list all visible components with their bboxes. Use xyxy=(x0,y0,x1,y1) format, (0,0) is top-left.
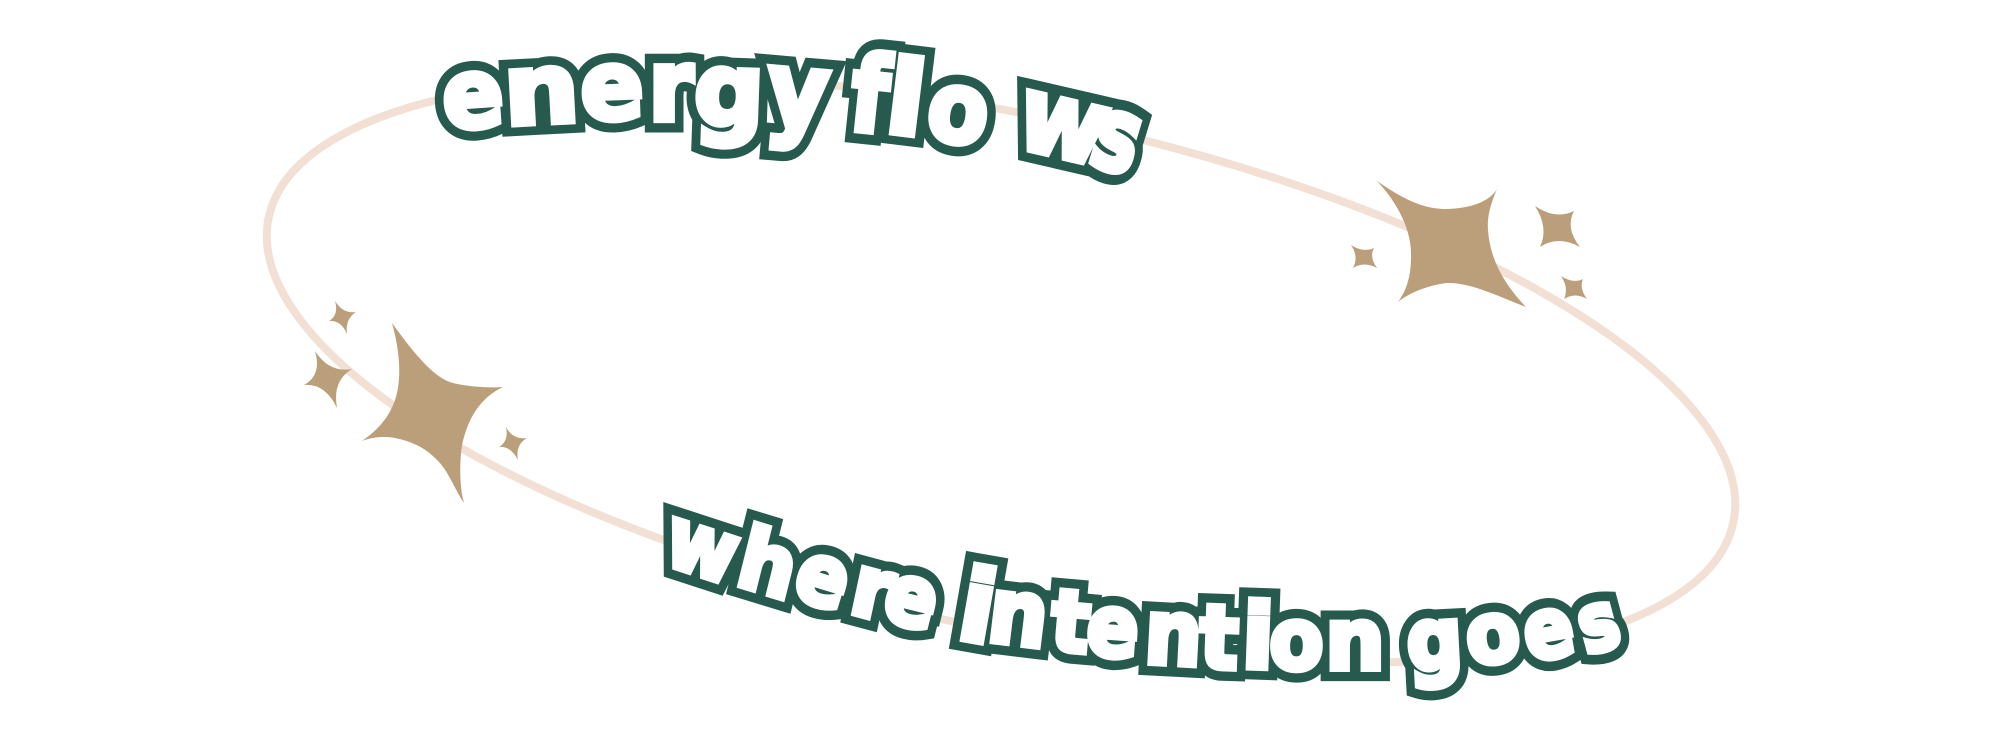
icon: large sparkle right xyxy=(1377,181,1526,307)
heading: energy flows: n xyxy=(501,31,582,149)
heading: where intention goes: e xyxy=(1084,576,1142,679)
heading: where intention goes: r xyxy=(843,534,903,642)
heading: where intention goes: n xyxy=(1325,590,1385,689)
heading: where intention goes: o xyxy=(1460,583,1525,686)
heading: energy flows: l xyxy=(879,37,933,161)
heading: where intention goes: o xyxy=(1269,590,1324,690)
heading: where intention goes: g xyxy=(1404,589,1465,691)
heading: energy flows: y xyxy=(762,27,834,155)
heading: where intention goes: s xyxy=(1567,573,1629,673)
heading: energy flows: w xyxy=(1007,52,1121,190)
heading: where intention goes: t xyxy=(1047,571,1094,673)
icon: small sparkle right of ring xyxy=(1351,245,1377,268)
heading: where intention goes: h xyxy=(729,509,807,620)
heading: energy flows: g xyxy=(692,31,766,151)
heading: energy flows: f xyxy=(845,32,896,158)
heading: energy flows: s xyxy=(1079,73,1157,199)
heading: energy flows: e xyxy=(438,36,507,152)
heading: where intention goes: r xyxy=(843,534,903,642)
heading: where intention goes: e xyxy=(1515,577,1581,681)
heading: where intention goes: w xyxy=(657,488,748,605)
heading: where intention goes: t xyxy=(1198,586,1240,690)
heading: where intention goes: t xyxy=(1198,586,1240,690)
heading: where intention goes: g xyxy=(1404,589,1465,691)
heading: where intention goes: e xyxy=(875,543,949,652)
heading: energy flows: e xyxy=(438,36,507,152)
heading: where intention goes: h xyxy=(729,509,807,620)
heading: where intention goes: o xyxy=(1269,590,1324,690)
heading: energy flows: e xyxy=(578,30,645,143)
heading: energy flows xyxy=(438,27,1157,199)
heading: where intention goes xyxy=(657,488,1629,691)
heading: energy flows: w xyxy=(1007,52,1121,190)
heading: energy flows: g xyxy=(692,31,766,151)
heading: where intention goes: i xyxy=(950,548,1006,668)
heading: where intention goes: i xyxy=(950,548,1006,668)
heading: energy flows: o xyxy=(921,48,997,169)
heading: energy flows: n xyxy=(501,31,582,149)
heading: where intention goes: o xyxy=(1460,583,1525,686)
heading: where intention goes: n xyxy=(983,559,1054,669)
heading: where intention goes: w xyxy=(657,488,748,605)
heading: energy flows: e xyxy=(578,30,645,143)
ring: tilted ellipse xyxy=(217,0,1785,741)
heading: where intention goes: n xyxy=(1325,590,1385,689)
heading: energy flows: l xyxy=(879,37,933,161)
heading: where intention goes: e xyxy=(784,522,862,632)
heading: where intention goes: n xyxy=(1142,580,1205,686)
heading: energy flows: r xyxy=(649,30,694,144)
heading: where intention goes: s xyxy=(1567,573,1629,673)
heading: where intention goes: e xyxy=(1515,577,1581,681)
icon: small sparkle left top xyxy=(329,301,356,334)
heading: where intention goes: e xyxy=(875,543,949,652)
heading: where intention goes: n xyxy=(983,559,1054,669)
heading: where intention goes: e xyxy=(1084,576,1142,679)
heading: where intention goes: i xyxy=(1240,584,1276,690)
icon: large sparkle left xyxy=(362,323,503,503)
icon: medium sparkle left xyxy=(304,351,352,408)
heading: energy flows: o xyxy=(921,48,997,169)
heading: where intention goes: t xyxy=(1047,571,1094,673)
icon: medium sparkle right xyxy=(1535,206,1580,247)
heading: where intention goes: e xyxy=(784,522,862,632)
heading: energy flows: s xyxy=(1079,73,1157,199)
heading: energy flows: f xyxy=(845,32,896,158)
icon: small sparkle right bottom xyxy=(1561,276,1587,299)
heading: energy flows: y xyxy=(762,27,834,155)
heading: where intention goes: n xyxy=(1142,580,1205,686)
heading: where intention goes: i xyxy=(1240,584,1276,690)
icon: small sparkle left bottom xyxy=(499,427,527,460)
heading: energy flows: r xyxy=(649,30,694,144)
